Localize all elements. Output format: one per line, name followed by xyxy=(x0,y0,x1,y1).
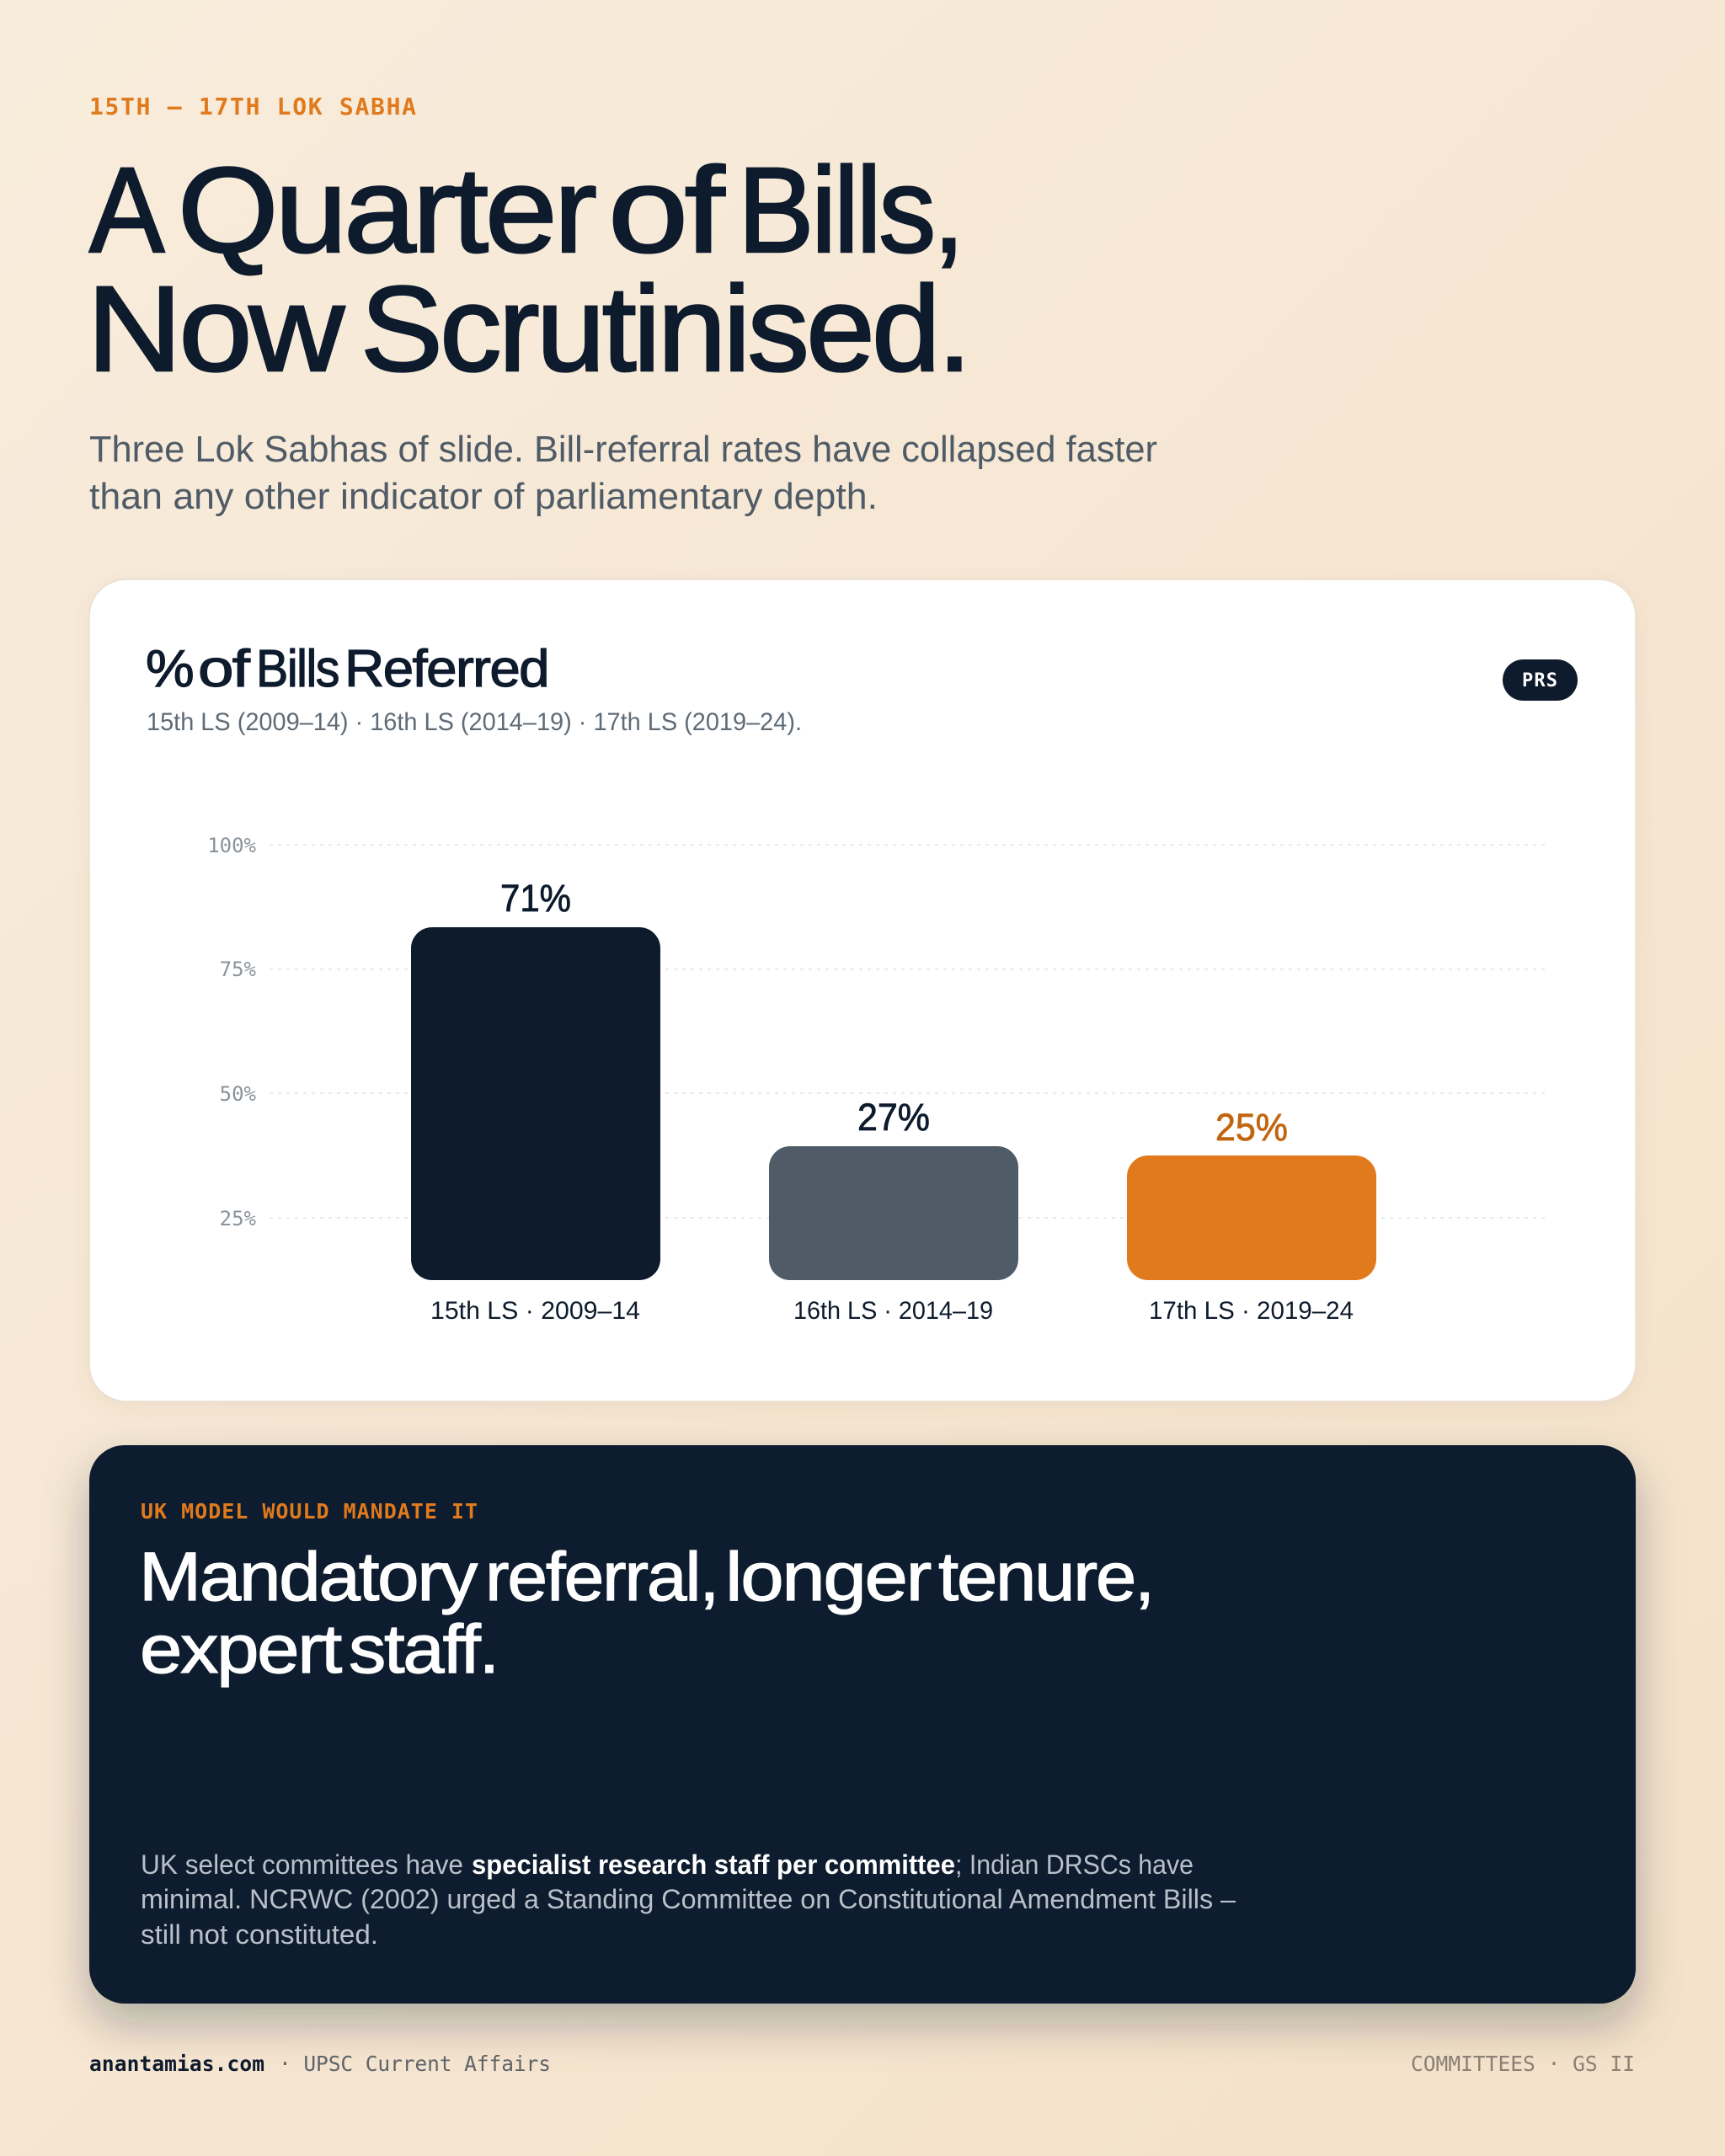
bar: 15th LS: 71% xyxy=(500,877,571,920)
callout body text: minimal. NCRWC (2002) urged a Standing Committee on Constitutional Amendment Bills – xyxy=(141,1884,1236,1914)
footer left: anantamias.com xyxy=(89,2052,264,2076)
title: A xyxy=(89,142,164,278)
bar: 17th LS: 17th LS · 2019–24 xyxy=(1149,1297,1354,1325)
card heading: % xyxy=(146,640,193,698)
card heading xyxy=(146,640,548,698)
card heading: Bills xyxy=(256,640,339,698)
callout heading: expert xyxy=(140,1611,342,1688)
callout body text: specialist research staff per committee xyxy=(472,1849,955,1880)
callout heading: staff. xyxy=(349,1611,498,1688)
card subheading: 15th LS (2009–14) · 16th LS (2014–19) · 17th LS (2019–24). xyxy=(147,708,802,736)
footer left: · UPSC Current Affairs xyxy=(279,2052,551,2076)
callout heading: longer xyxy=(725,1539,931,1615)
bar: 16th LS: 27% xyxy=(857,1096,930,1139)
card heading: Referred xyxy=(344,640,548,698)
subtitle: than any other indicator of parliamentary depth. xyxy=(89,476,878,517)
y axis labels: 75% xyxy=(220,958,257,981)
bar: 15th LS: 15th LS · 2009–14 xyxy=(430,1297,640,1325)
title xyxy=(87,142,969,397)
y axis labels: 50% xyxy=(220,1082,257,1106)
title: Bills, xyxy=(738,142,962,278)
y axis labels: 25% xyxy=(220,1207,257,1230)
title: Scrutinised. xyxy=(360,261,969,397)
callout body text: UK select committees have xyxy=(141,1849,463,1880)
bar: 16th LS: 16th LS · 2014–19 xyxy=(793,1297,993,1325)
bar: 15th LS xyxy=(411,877,660,1325)
chart: percent of bills referred xyxy=(207,834,1545,1325)
callout heading: tenure, xyxy=(938,1539,1153,1615)
y axis labels xyxy=(207,834,257,1230)
callout heading xyxy=(139,1539,1153,1688)
source badge xyxy=(1503,659,1578,701)
callout eyebrow: UK MODEL WOULD MANDATE IT xyxy=(141,1499,478,1524)
footer left xyxy=(89,2052,551,2076)
bar: 16th LS xyxy=(769,1096,1018,1325)
callout heading: referral, xyxy=(485,1539,718,1615)
subtitle: Three Lok Sabhas of slide. Bill-referral rates have collapsed faster xyxy=(89,429,1157,470)
source badge: PRS xyxy=(1522,670,1557,691)
title: of xyxy=(608,142,725,278)
panel: bar chart card xyxy=(89,579,1636,1401)
panel: UK model callout xyxy=(89,1445,1636,2004)
title: Now xyxy=(87,261,345,397)
bar: 17th LS xyxy=(1127,1106,1376,1325)
callout heading: Mandatory xyxy=(139,1539,478,1615)
card heading: of xyxy=(198,640,251,698)
callout body text xyxy=(141,1849,1236,1950)
callout body text: still not constituted. xyxy=(141,1919,378,1950)
subtitle xyxy=(89,429,1157,517)
callout body text: ; Indian DRSCs have xyxy=(955,1849,1194,1880)
y axis labels: 100% xyxy=(207,834,257,857)
footer right: COMMITTEES · GS II xyxy=(1411,2052,1635,2076)
eyebrow: 15TH — 17TH LOK SABHA xyxy=(89,93,416,120)
title: Quarter xyxy=(178,142,595,278)
bar: 17th LS: 25% xyxy=(1215,1106,1288,1149)
